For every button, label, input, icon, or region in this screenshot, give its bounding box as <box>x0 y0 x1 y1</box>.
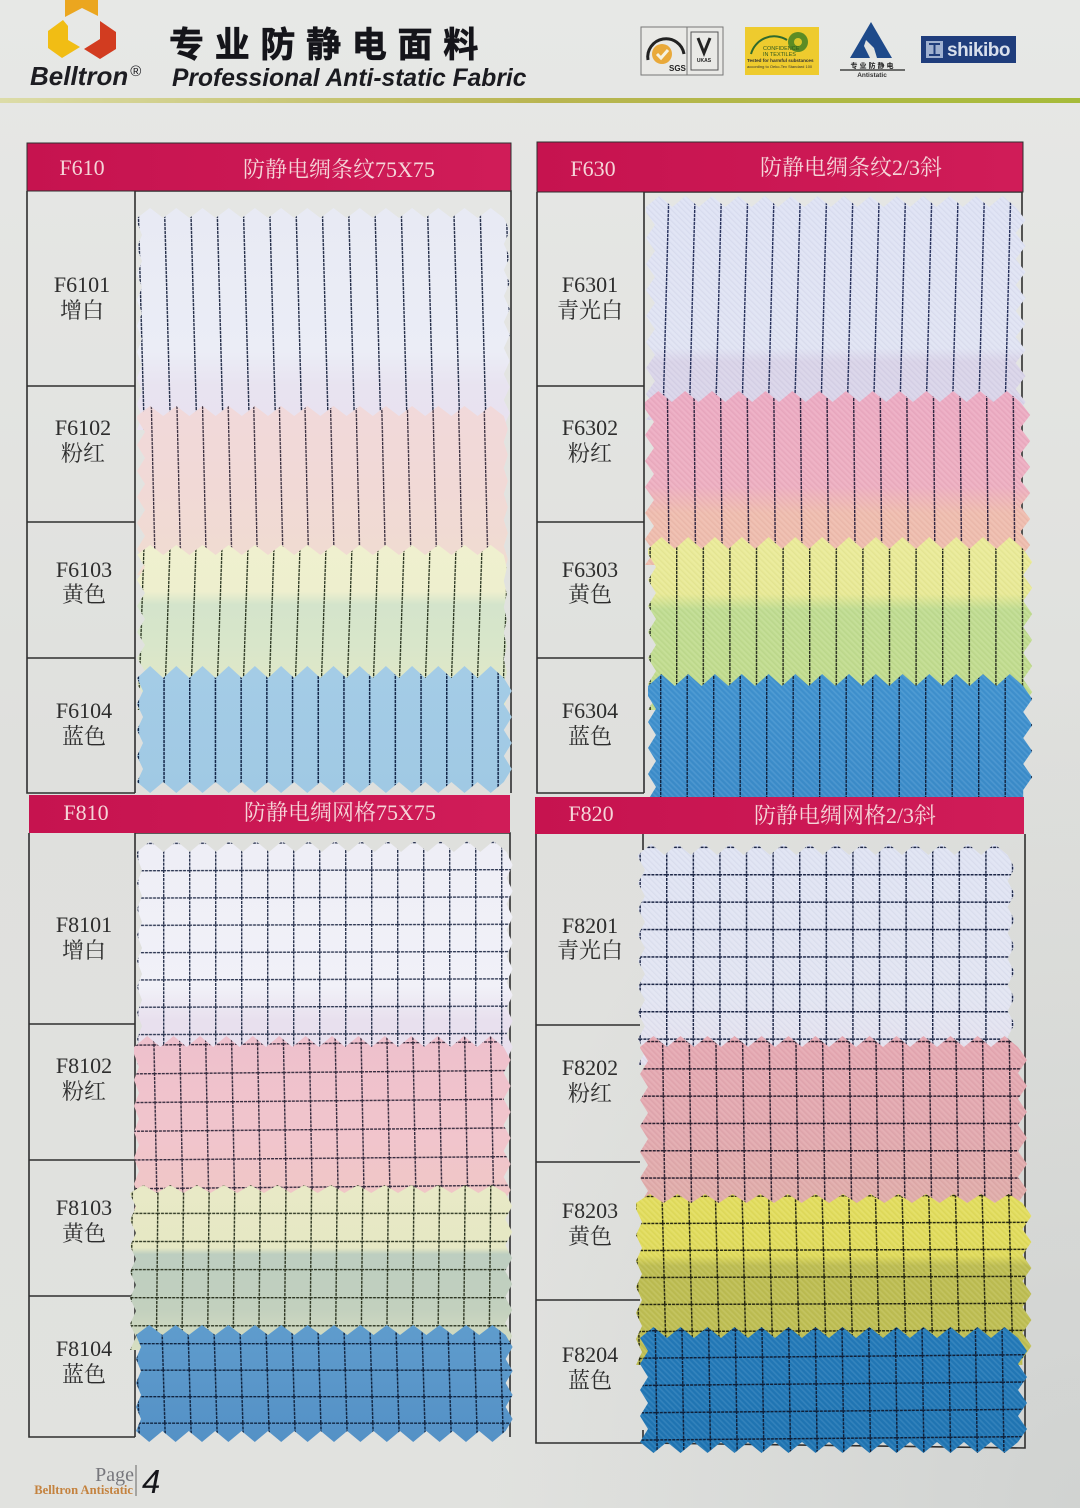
label: F6101: 增白 <box>60 298 104 323</box>
label: F6103: F6103 <box>56 557 112 582</box>
footer: page number: 4 <box>142 1463 160 1500</box>
logo: Belltron wordmark: Belltron <box>30 61 128 91</box>
swatch: F6104 blue <box>137 666 512 793</box>
label: F8202: 粉红 <box>568 1081 612 1106</box>
swatch: F8103 yellow <box>130 1185 512 1350</box>
logo: Belltron wordmark: ® <box>130 63 141 80</box>
swatch: F8101 white <box>137 841 513 1065</box>
swatch: F8104 blue <box>136 1325 513 1442</box>
icon: antistatic warning symbol <box>840 22 905 79</box>
header divider rule <box>0 98 1080 103</box>
table frame <box>29 833 510 1437</box>
swatch: F6304 blue <box>648 674 1032 800</box>
panel header: F610 <box>59 155 105 180</box>
label: F8101: F8101 <box>56 912 112 937</box>
label: F8103: 黄色 <box>62 1221 106 1246</box>
certification: Confidence in Textiles: IN TEXTILES <box>763 52 796 58</box>
panel header <box>27 143 511 191</box>
label: F8101: 增白 <box>62 938 106 963</box>
label: F8203: F8203 <box>562 1198 618 1223</box>
swatch: F6301 white <box>646 196 1026 420</box>
footer: Belltron Antistatic: Belltron Antistatic <box>34 1483 133 1497</box>
certification: Confidence in Textiles: Tested for harmful substances <box>747 58 814 63</box>
logo: shikibo: shikibo <box>947 40 1010 61</box>
swatch: F6101 white <box>137 208 510 430</box>
panel: F610 striped 75X75 <box>27 143 512 793</box>
label: F8204: 蓝色 <box>568 1368 612 1393</box>
swatch: F6303 yellow <box>648 537 1032 710</box>
label: F8104: 蓝色 <box>62 1362 106 1387</box>
panel header: F630 <box>570 156 616 181</box>
label: F6301: F6301 <box>562 272 618 297</box>
label: F6104: 蓝色 <box>62 724 106 749</box>
label: F8102: F8102 <box>56 1053 112 1078</box>
table frame <box>536 834 1025 1448</box>
label: F6303: F6303 <box>562 557 618 582</box>
label: F6303: 黄色 <box>568 582 612 607</box>
label: F8202: F8202 <box>562 1055 618 1080</box>
panel header <box>29 795 510 833</box>
swatch: F6102 pink <box>137 406 508 575</box>
label: F6304: 蓝色 <box>568 724 612 749</box>
label: F6102: 粉红 <box>61 441 105 466</box>
label: F8104: F8104 <box>56 1336 112 1361</box>
certification: Confidence in Textiles <box>745 27 819 75</box>
certification: SGS and UKAS: UKAS <box>697 58 712 64</box>
label: F6304: F6304 <box>562 698 618 723</box>
swatch: F6103 yellow <box>137 545 507 711</box>
table frame <box>537 192 1022 793</box>
swatch: F8204 blue <box>640 1327 1027 1453</box>
label: F8201: F8201 <box>562 913 618 938</box>
label: F6302: F6302 <box>562 415 618 440</box>
panel header: F810 <box>63 800 109 825</box>
swatch: F8203 yellow <box>636 1194 1031 1365</box>
label: F8203: 黄色 <box>568 1224 612 1249</box>
title: Chinese: 专业防静电面料 <box>169 26 489 65</box>
label: F6103: 黄色 <box>62 582 106 607</box>
logo: shikibo <box>921 36 1016 63</box>
certification: Confidence in Textiles: CONFIDENCE <box>763 46 800 52</box>
panel header: 防静电绸条纹2/3斜 <box>760 155 942 180</box>
certification: Confidence in Textiles: according to Oeko-Tex Standard 100 <box>747 64 813 69</box>
panel header <box>535 797 1024 834</box>
page header <box>0 0 1080 103</box>
label: F6104: F6104 <box>56 698 112 723</box>
panel header: 防静电绸网格75X75 <box>244 800 436 825</box>
swatch: F6302 pink <box>645 391 1030 565</box>
label: F8103: F8103 <box>56 1195 112 1220</box>
certification: SGS and UKAS: SGS <box>669 64 687 73</box>
swatch: F8202 pink <box>640 1036 1027 1230</box>
label: F8201: 青光白 <box>557 938 623 963</box>
icon: antistatic warning symbol: 专业防静电 <box>850 61 896 70</box>
label: F6302: 粉红 <box>568 441 612 466</box>
icon: antistatic warning symbol: Antistatic <box>857 72 887 79</box>
table frame <box>27 191 511 793</box>
panel: F630 striped 2/3 twill <box>537 142 1032 800</box>
panel header: F820 <box>568 801 614 826</box>
label: F6101: F6101 <box>54 272 110 297</box>
swatch: F8201 white <box>638 844 1015 1065</box>
panel header: 防静电绸网格2/3斜 <box>754 803 936 828</box>
panel header: 防静电绸条纹75X75 <box>243 157 435 182</box>
label: F8102: 粉红 <box>62 1079 106 1104</box>
title: English: Professional Anti-static Fabric <box>172 65 527 92</box>
label: F8204: F8204 <box>562 1342 618 1367</box>
footer: divider <box>135 1465 137 1496</box>
panel: F810 grid 75X75 <box>29 795 513 1442</box>
panel: F820 grid 2/3 twill <box>535 797 1031 1453</box>
certification: SGS and UKAS <box>641 27 723 75</box>
footer: Page label: Page <box>95 1464 134 1486</box>
swatch: F8102 pink <box>134 1036 511 1210</box>
label: F6301: 青光白 <box>557 298 623 323</box>
page footer <box>34 1463 160 1500</box>
panel header <box>537 142 1023 192</box>
logo: Belltron hexagon mark <box>48 0 116 59</box>
label: F6102: F6102 <box>55 415 111 440</box>
